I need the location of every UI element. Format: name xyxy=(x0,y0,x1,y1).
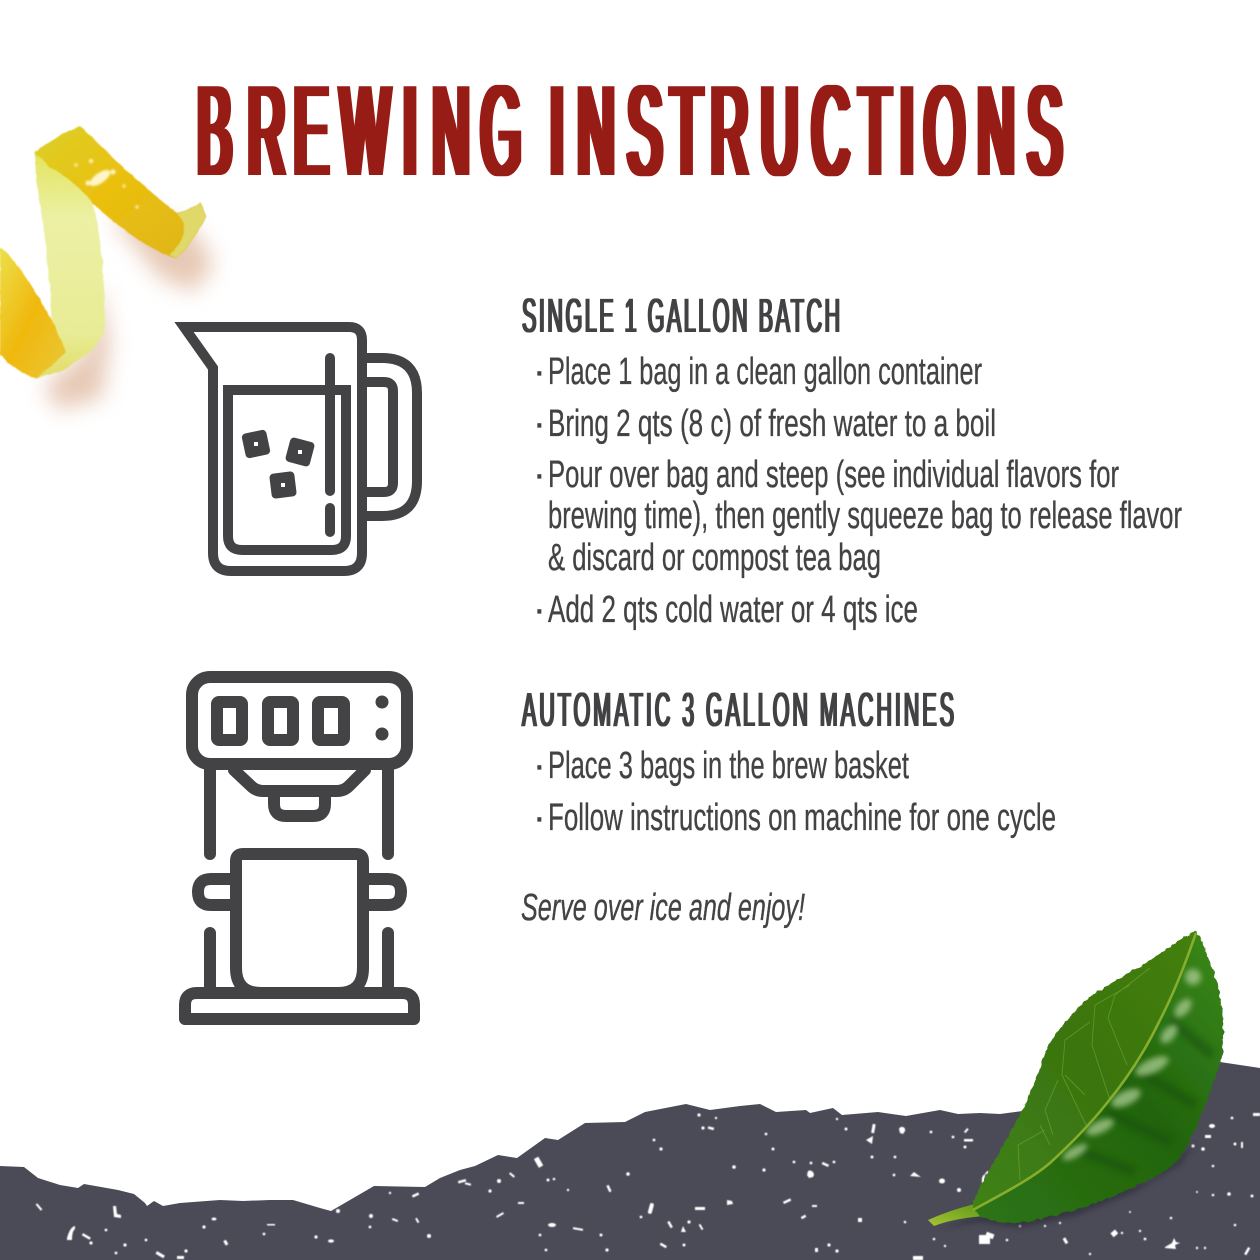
lemon pale pith band xyxy=(35,150,105,378)
leaf lower half xyxy=(973,931,1224,1223)
lemon peel xyxy=(0,126,214,410)
section 1: single 1 gallon batch xyxy=(522,288,1182,631)
leaf shine xyxy=(1060,969,1201,1163)
heading: SINGLE 1 GALLON BATCH xyxy=(522,288,840,342)
leaf upper half xyxy=(973,931,1196,1208)
ice cubes xyxy=(241,429,315,499)
steps: · xyxy=(533,351,546,393)
machine head xyxy=(192,677,407,764)
leaf veins xyxy=(1018,968,1150,1180)
icon: automatic tea machine xyxy=(185,677,414,1019)
steps xyxy=(533,745,1056,839)
closing note: Serve over ice and enjoy! xyxy=(521,887,805,929)
pitcher body xyxy=(184,327,362,571)
title: BREWING INSTRUCTIONS xyxy=(197,58,1062,203)
machine legs xyxy=(210,768,388,990)
pitcher handle xyxy=(362,358,417,516)
machine pot xyxy=(236,854,363,993)
section 2: automatic 3 gallon machines xyxy=(522,682,1056,839)
machine funnel and spout xyxy=(234,770,365,816)
steps: · xyxy=(533,454,546,496)
steps: · xyxy=(533,745,546,787)
leaf midrib xyxy=(973,933,1196,1210)
lemon lower rind xyxy=(0,247,66,378)
steps: Place 1 bag in a clean gallon container xyxy=(548,351,982,393)
leaf blades xyxy=(973,931,1224,1223)
lemon upper rind xyxy=(35,126,206,258)
lemon highlights xyxy=(74,159,138,208)
steps: · xyxy=(533,797,546,839)
lemon shadows xyxy=(44,215,214,410)
pitcher highlight line xyxy=(325,358,335,532)
heading: AUTOMATIC 3 GALLON MACHINES xyxy=(522,682,954,736)
leaf dark side ribs xyxy=(1078,1020,1212,1172)
steps: & discard or compost tea bag xyxy=(548,537,881,579)
steps: Bring 2 qts (8 c) of fresh water to a boil xyxy=(548,403,996,445)
machine base xyxy=(185,993,414,1019)
machine indicator lights xyxy=(376,696,388,740)
white specks xyxy=(36,1113,1260,1260)
lemon rind end pale edge xyxy=(170,202,206,258)
icon: pitcher of iced tea xyxy=(184,327,417,571)
machine displays xyxy=(217,702,344,740)
leaf xyxy=(928,931,1224,1228)
steps: Add 2 qts cold water or 4 qts ice xyxy=(548,589,918,631)
steps xyxy=(533,351,1182,631)
steps: · xyxy=(533,403,546,445)
pot handles xyxy=(198,879,401,905)
ground: torn dark paper with white specks xyxy=(0,1062,1260,1260)
pitcher liquid level xyxy=(228,390,346,550)
leaf shadow xyxy=(940,1142,1196,1228)
steps: Place 3 bags in the brew basket xyxy=(548,745,909,787)
leaf stem xyxy=(928,1204,985,1226)
steps: · xyxy=(533,589,546,631)
